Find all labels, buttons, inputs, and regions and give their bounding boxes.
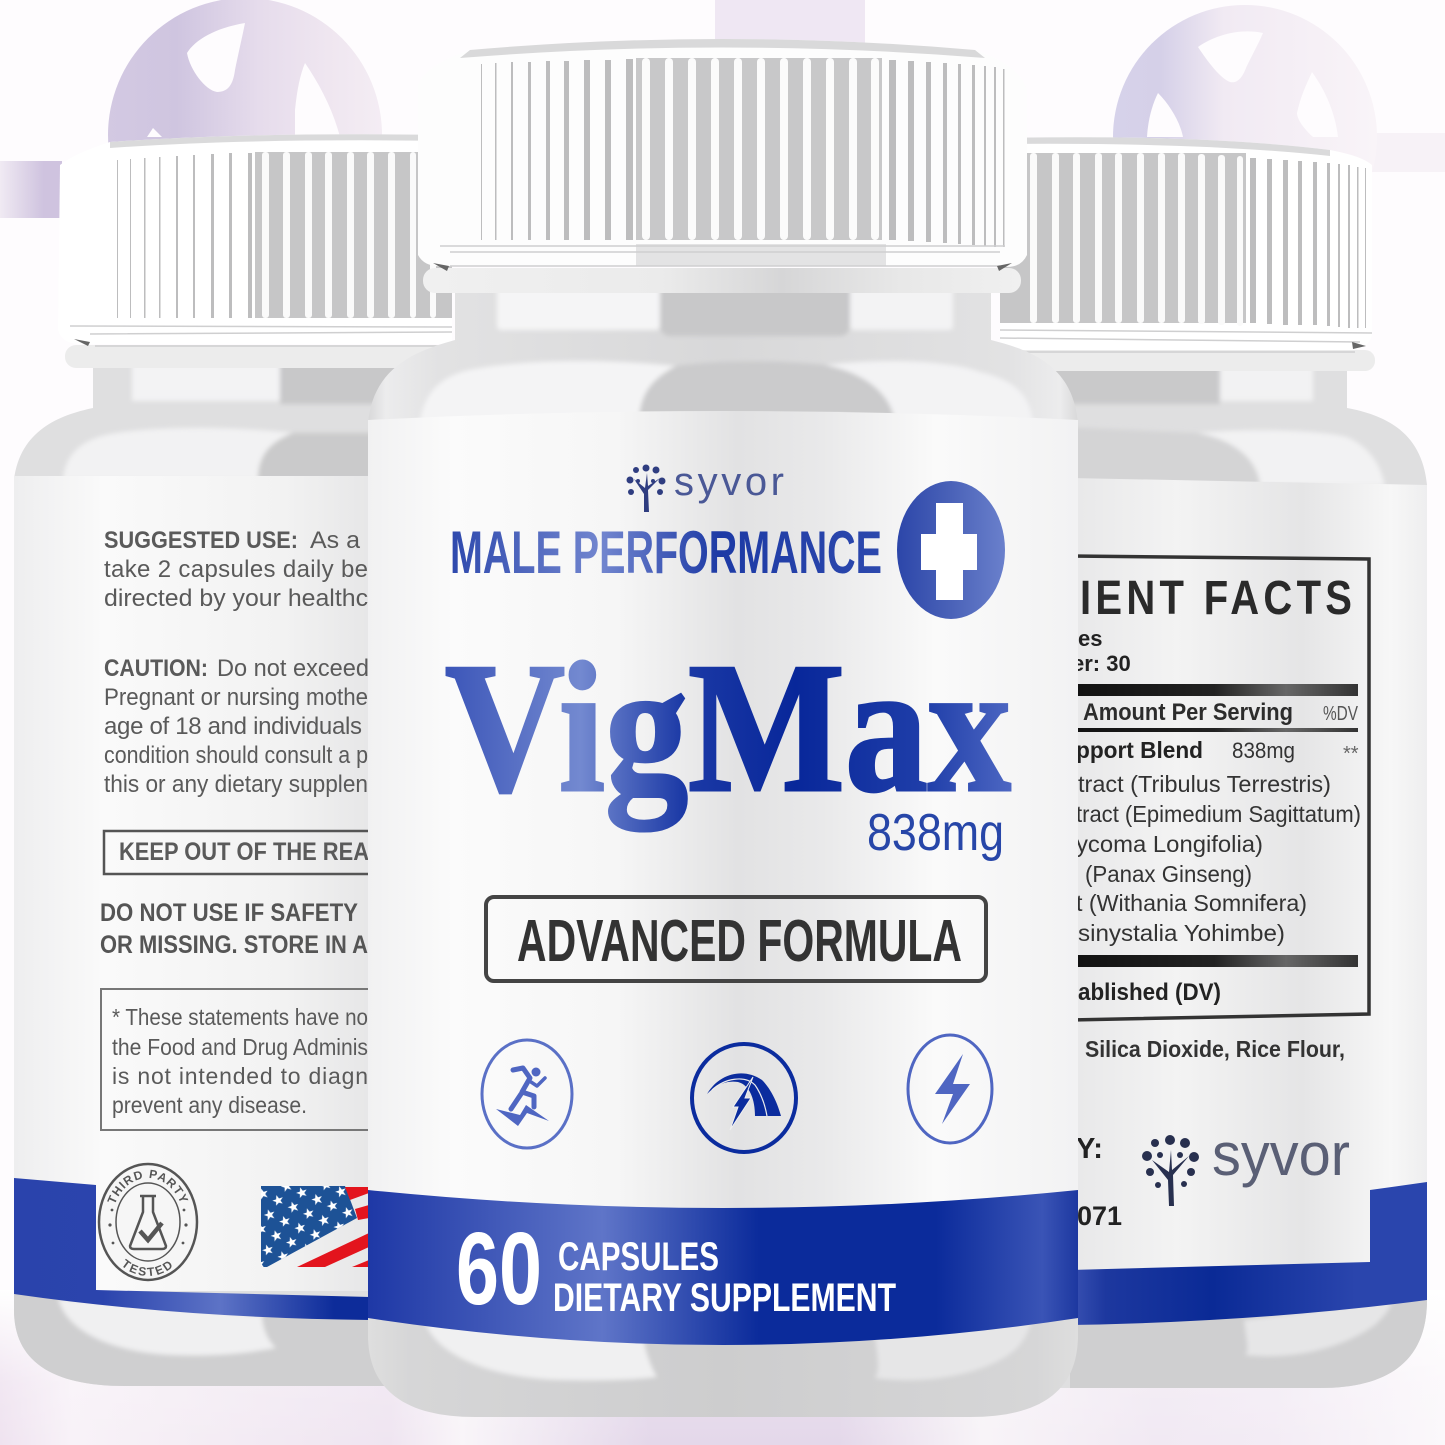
center bottle cap [418,39,1027,271]
right bottle blue band [1070,1182,1427,1325]
fda disclaimer box [101,989,391,1130]
left bottle shoulder shading [63,428,400,480]
capsule count: 60: 60 [456,1211,542,1326]
caution text: condition should consult a p [104,742,368,769]
caution text: CAUTION: [104,655,208,682]
supplement facts panel: ** [1343,743,1359,765]
right bottle label [1070,478,1427,1271]
center bottle bottom base [368,1315,1078,1417]
center bottle label [368,411,1078,1325]
supplement facts panel [1070,556,1369,1020]
left bottle flange [65,345,455,368]
supplement facts panel: IENT FACTS [1080,572,1352,625]
right bottle bottom base [1070,1290,1427,1388]
caution text: this or any dietary supplen [104,771,368,798]
center bottle flange [423,268,1021,293]
left bottle body [14,360,440,1386]
left bottle neck shading [132,352,400,404]
suggested use text: take 2 capsules daily be [104,556,368,583]
right bottle [1000,137,1427,1388]
left bottle label [14,476,374,1291]
supplement facts panel: %DV [1323,703,1358,725]
supplement facts panel: pport Blend [1076,737,1203,763]
center bottle neck shading [497,276,953,336]
center bottle bottom highlight right [875,1315,1032,1380]
supplement facts panel: sinystalia Yohimbe) [1078,920,1285,946]
background purple wheel right [1113,5,1377,269]
supplement facts panel: 838mg [1232,738,1295,763]
left bottle cap [58,134,452,346]
logo: syvor center [626,460,784,512]
center bottle bottom highlight left [424,1320,657,1380]
phone number text: 3071 [1062,1201,1122,1231]
safety warning text: DO NOT USE IF SAFETY [100,899,358,927]
icon: plus circle [897,481,1005,619]
icon: runner [482,1040,572,1148]
supplement facts panel: (Panax Ginseng) [1085,861,1252,887]
badge: third party tested: THIRD PARTY [107,1170,188,1202]
fda disclaimer box: is not intended to diagn [112,1063,368,1089]
heading: male performance: MALE PERFORMANCE [450,519,882,586]
advanced formula box: ADVANCED FORMULA [517,908,962,974]
suggested use text: As a [310,527,361,554]
safety warning text: OR MISSING. STORE IN A [100,931,368,959]
caution text: Do not exceed [217,655,369,682]
supplement facts panel: tract (Tribulus Terrestris) [1078,771,1331,797]
keep out of reach box [104,831,394,874]
left bottle bottom highlight [58,1298,276,1356]
keep out of reach box: KEEP OUT OF THE REA [119,838,369,866]
distributed by text: Y: [1076,1133,1103,1165]
other ingredients text: Silica Dioxide, Rice Flour, [1085,1036,1345,1062]
supplement facts panel: er: 30 [1072,651,1131,676]
right bottle shoulder shading [1000,424,1385,486]
safety warning text [100,899,368,959]
fda disclaimer box: the Food and Drug Adminis [112,1034,368,1060]
logo: syvor right: syvor [1212,1121,1350,1188]
supplement facts panel: ablished (DV) [1078,979,1221,1006]
suggested use text: directed by your healthc [104,585,368,612]
band text: capsules: CAPSULES [558,1235,719,1279]
center bottle blue band [368,1190,1078,1345]
right bottle neck shading [1047,352,1313,404]
supplement facts panel: t (Withania Somnifera) [1076,890,1307,916]
badge: third party tested [98,1162,198,1282]
right bottle cap [1000,137,1372,352]
right bottle flange [1000,350,1375,371]
supplement facts panel: tract (Epimedium Sagittatum) [1076,801,1361,827]
suggested use text: SUGGESTED USE: [104,527,298,554]
caution text: age of 18 and individuals [104,713,362,740]
center bottle body [368,285,1078,1340]
dosage: 838mg: 838mg [867,804,1004,862]
logo: syvor right [1142,1121,1350,1206]
center bottle shoulder shading [420,361,1033,422]
icon: lightning arch [692,1044,796,1152]
icon: lightning bolt [908,1035,992,1143]
left bottle bottom base [14,1290,440,1386]
right bottle bottom highlight [1244,1300,1392,1356]
left bottle blue band [14,1178,370,1320]
caution text [104,655,369,798]
right bottle body [1000,360,1427,1388]
suggested use text [104,527,368,612]
fda disclaimer box: prevent any disease. [112,1092,307,1118]
fda disclaimer box: * These statements have no [112,1004,368,1030]
logo: syvor center: syvor [674,460,784,504]
supplement facts panel: ycoma Longifolia) [1076,831,1263,857]
supplement facts panel: es [1078,626,1102,651]
background purple wheel left [108,0,382,272]
supplement facts panel: Amount Per Serving [1083,699,1293,726]
left bottle [14,134,452,1386]
advanced formula box [486,897,986,981]
band text: dietary supplement: DIETARY SUPPLEMENT [553,1276,896,1320]
icon: american flag [261,1186,369,1267]
title: VigMax: VigMax [445,625,1011,831]
caution text: Pregnant or nursing mothe [104,684,368,711]
center bottle [368,39,1078,1417]
badge: third party tested: TESTED [123,1258,172,1276]
